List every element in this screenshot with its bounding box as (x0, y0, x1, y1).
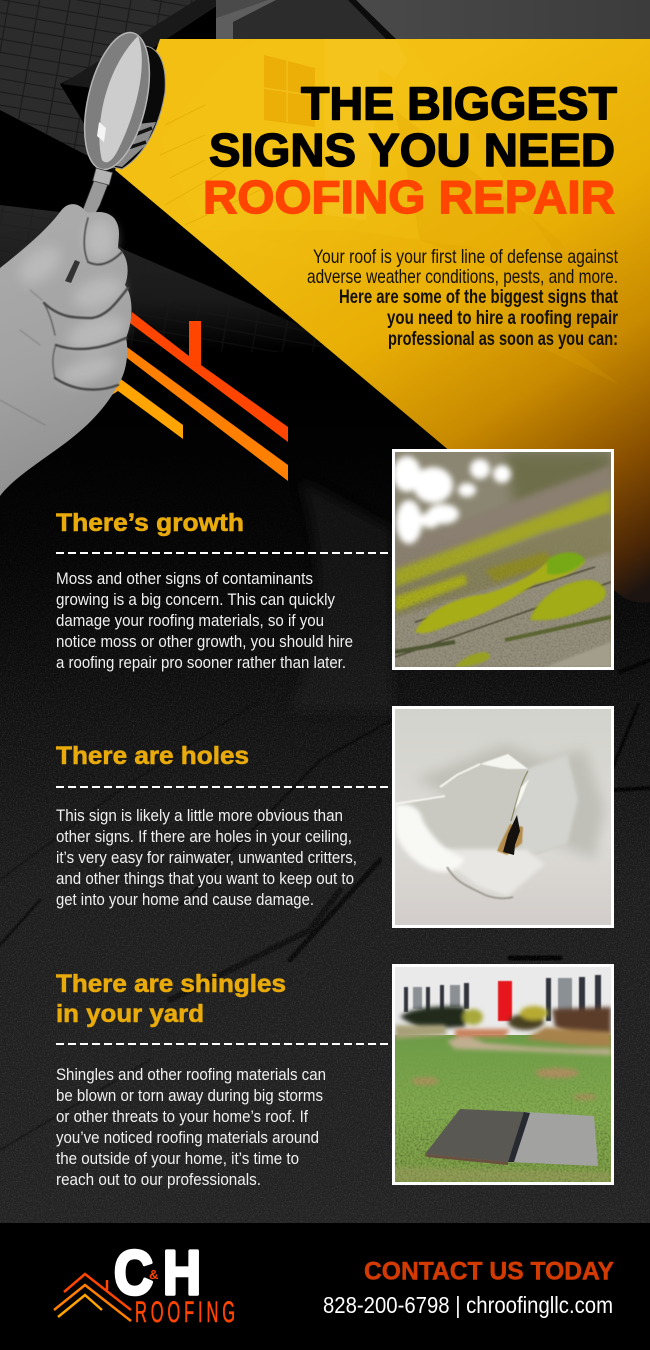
section: there are shingles in your yard (56, 970, 392, 1189)
magnifier lens (73, 26, 161, 176)
heading: shingles: in your yard (56, 1000, 204, 1028)
magnifier rim (104, 46, 165, 169)
logo letters (114, 1239, 201, 1308)
panel: yellow title area (115, 39, 650, 602)
body text: shingles: you’ve noticed roofing materials around (56, 1129, 319, 1147)
body text: holes: This sign is likely a little more obvious than (56, 807, 343, 825)
magnifier handle (58, 170, 112, 284)
photo: moss on shingles (392, 449, 614, 670)
house overlay in panel (160, 39, 620, 385)
body text: holes: it’s very easy for rainwater, unwanted critters, (56, 849, 357, 867)
body text: growth: damage your roofing materials, so if you (56, 612, 324, 630)
icon: magnifying glass (58, 26, 165, 284)
divider: holes (56, 786, 392, 788)
body text: holes: and other things that you want to keep out to (56, 870, 354, 888)
logo roof chevrons (54, 1274, 131, 1321)
body text: growth (56, 570, 353, 672)
contact heading: CONTACT US TODAY (364, 1258, 614, 1286)
logo letters: & (149, 1267, 158, 1282)
title: SIGNS YOU NEED (209, 124, 615, 176)
body text: shingles: or other threats to your home’s roof. If (56, 1108, 308, 1126)
hand finger highlights (13, 220, 129, 391)
body text: holes: get into your home and cause damage. (56, 891, 314, 909)
body text: shingles (56, 1066, 326, 1189)
heading: holes: There are holes (56, 742, 249, 770)
body text: growth: a roofing repair pro sooner rather than later. (56, 654, 346, 672)
logo wordmark: ROOFING (135, 1296, 235, 1329)
moss clumps (415, 552, 606, 667)
accent: roof stripes with chimney (107, 312, 288, 481)
heading: growth: There’s growth (56, 509, 244, 537)
photo: hole in ceiling (392, 706, 614, 928)
title: ROOFING REPAIR (203, 171, 615, 223)
photo: shingle on lawn (392, 964, 614, 1185)
logo letters: C (114, 1239, 153, 1308)
illustration: hand holding magnifier (0, 204, 132, 496)
body text: growth: notice moss or other growth, you should hire (56, 633, 353, 651)
background: dark roof (0, 480, 650, 1317)
footer (0, 1223, 650, 1350)
body text: shingles: reach out to our professionals. (56, 1171, 261, 1189)
intro text (307, 246, 618, 350)
heading: shingles: There are shingles (56, 970, 286, 998)
hand grip shadow (65, 260, 80, 283)
heading: shingles (56, 970, 286, 1028)
red door (498, 981, 512, 1021)
shingle on lawn (425, 1109, 598, 1166)
title: THE BIGGEST (301, 78, 617, 130)
hand creases (0, 218, 128, 425)
divider: shingles (56, 1043, 392, 1045)
body text: holes (56, 807, 357, 909)
divider: growth (56, 552, 392, 554)
title (203, 78, 617, 223)
background: upper left shingles (0, 0, 345, 352)
contact details: 828-200-6798 | chroofingllc.com (323, 1292, 613, 1318)
body text: shingles: Shingles and other roofing materials can (56, 1066, 326, 1084)
logo: C&H Roofing (54, 1239, 235, 1329)
body text: holes: other signs. If there are holes in your ceiling, (56, 828, 352, 846)
background: top house band (216, 0, 650, 39)
section: there's growth (56, 509, 392, 672)
body text: growth: Moss and other signs of contaminants (56, 570, 313, 588)
section: there are holes (56, 742, 392, 909)
logo letters: H (163, 1239, 201, 1308)
body text: shingles: be blown or torn away during big storms (56, 1087, 323, 1105)
body text: shingles: the outside of your home, it’s time to (56, 1150, 299, 1168)
body text: growth: growing is a big concern. This can quickly (56, 591, 336, 609)
